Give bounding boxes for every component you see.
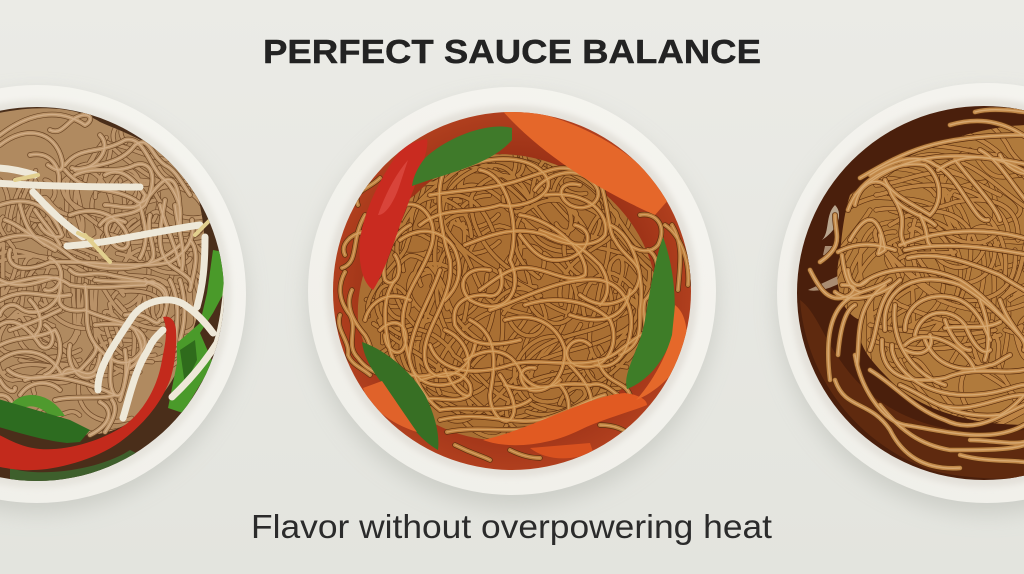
title: PERFECT SAUCE BALANCE: [263, 34, 761, 71]
left bowl: noodles with too little sauce: [0, 79, 246, 513]
left noodle mass: [0, 108, 204, 438]
right noodle mass: [807, 107, 1024, 470]
center bowl: perfectly balanced sauce: [304, 87, 720, 511]
center noodle mass: [336, 154, 691, 463]
left vegetables: peppers and bean sprouts: [0, 168, 228, 482]
subtitle: Flavor without overpowering heat: [251, 508, 772, 545]
right bowl: too much dark sauce: [772, 83, 1024, 514]
center vegetables: carrot, red pepper, snow peas: [360, 108, 687, 458]
right sauce highlights: [800, 205, 1024, 479]
